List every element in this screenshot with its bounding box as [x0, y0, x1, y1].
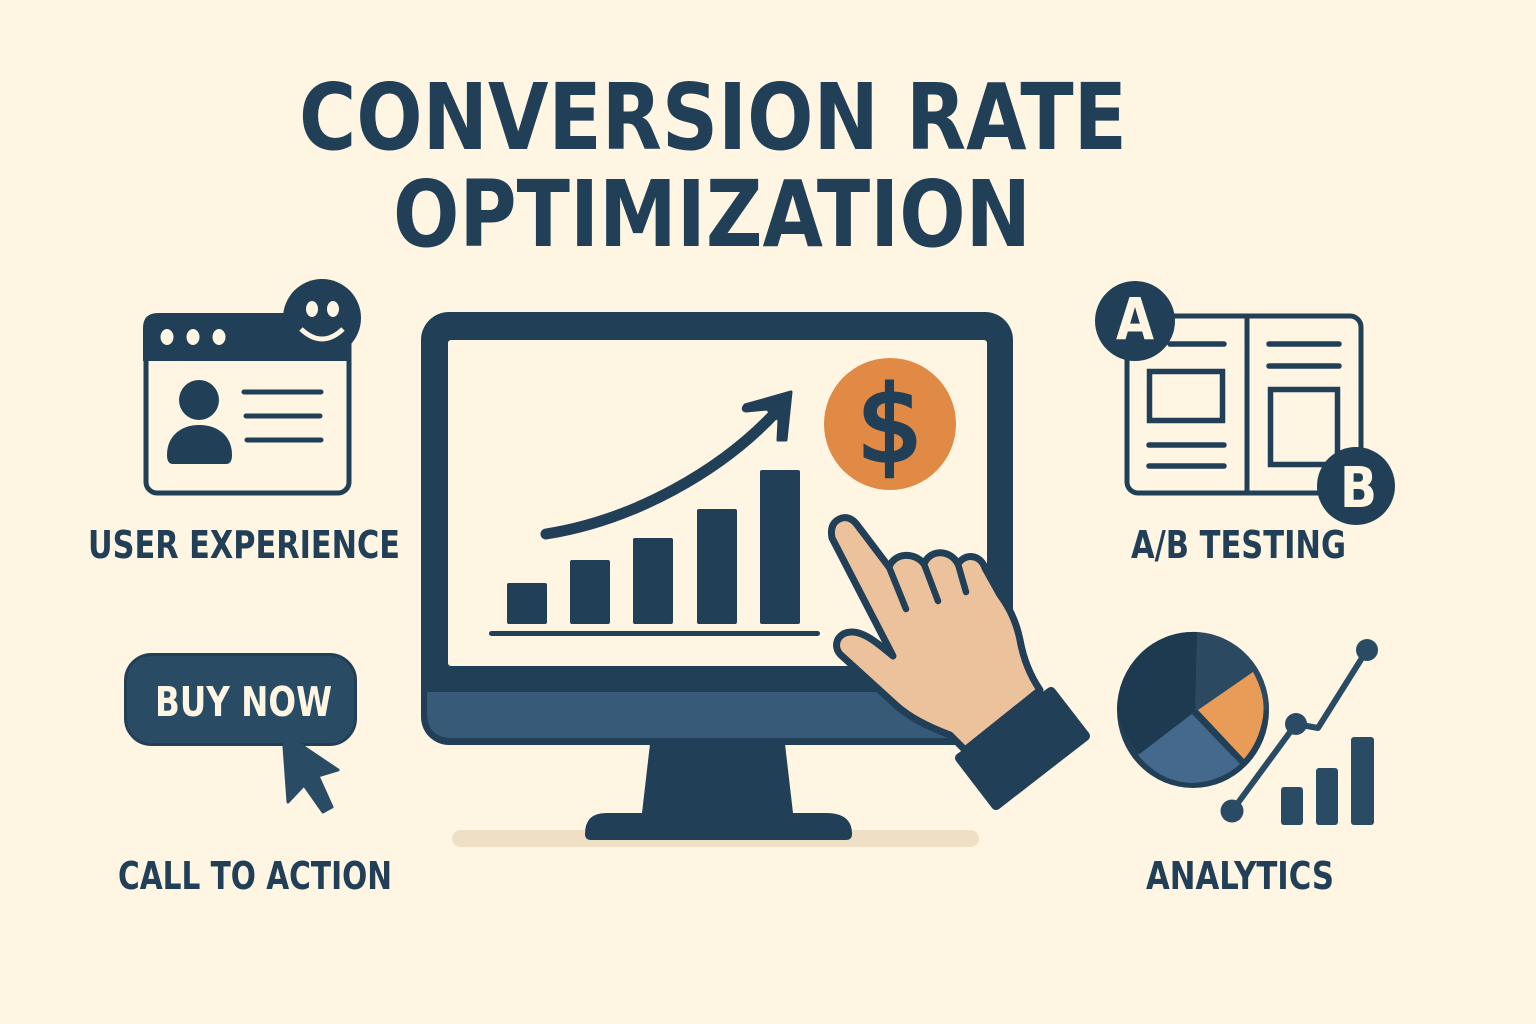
monitor screen	[448, 340, 987, 666]
icon: dollar coin	[824, 358, 956, 490]
icon: a/b split pages: A	[1116, 285, 1154, 353]
title	[299, 64, 1127, 268]
icon: mini bar chart	[1281, 737, 1374, 825]
panel: monitor	[421, 312, 1085, 847]
icon: cursor arrow	[283, 733, 338, 812]
icon: a/b split pages: B	[1340, 456, 1377, 521]
icon: browser window with user profile	[143, 279, 361, 493]
label: a/b testing: A/B TESTING	[1131, 523, 1346, 567]
panel: call to action	[118, 654, 392, 898]
icon: pointing hand	[831, 518, 1085, 805]
label: user experience: USER EXPERIENCE	[88, 523, 400, 567]
monitor stand	[585, 744, 852, 840]
growth arrow	[546, 392, 791, 534]
label: analytics: ANALYTICS	[1146, 854, 1334, 898]
icon: pie chart	[1117, 632, 1269, 788]
monitor body	[421, 312, 1013, 745]
title: OPTIMIZATION	[393, 161, 1031, 268]
icon: buy now button: BUY NOW	[155, 678, 332, 726]
monitor chin highlight	[427, 692, 1007, 738]
panel: analytics	[1117, 632, 1378, 898]
panel: a/b testing	[1095, 281, 1395, 567]
icon: line chart	[1220, 639, 1378, 822]
label: call to action: CALL TO ACTION	[118, 854, 392, 898]
icon: dollar coin: $	[857, 364, 923, 486]
shadow under monitor	[452, 830, 979, 847]
icon: buy now button	[126, 654, 356, 744]
title: CONVERSION RATE	[299, 64, 1127, 171]
panel: user experience	[88, 279, 400, 567]
icon: a/b split pages	[1095, 281, 1395, 525]
bar chart	[489, 470, 820, 636]
